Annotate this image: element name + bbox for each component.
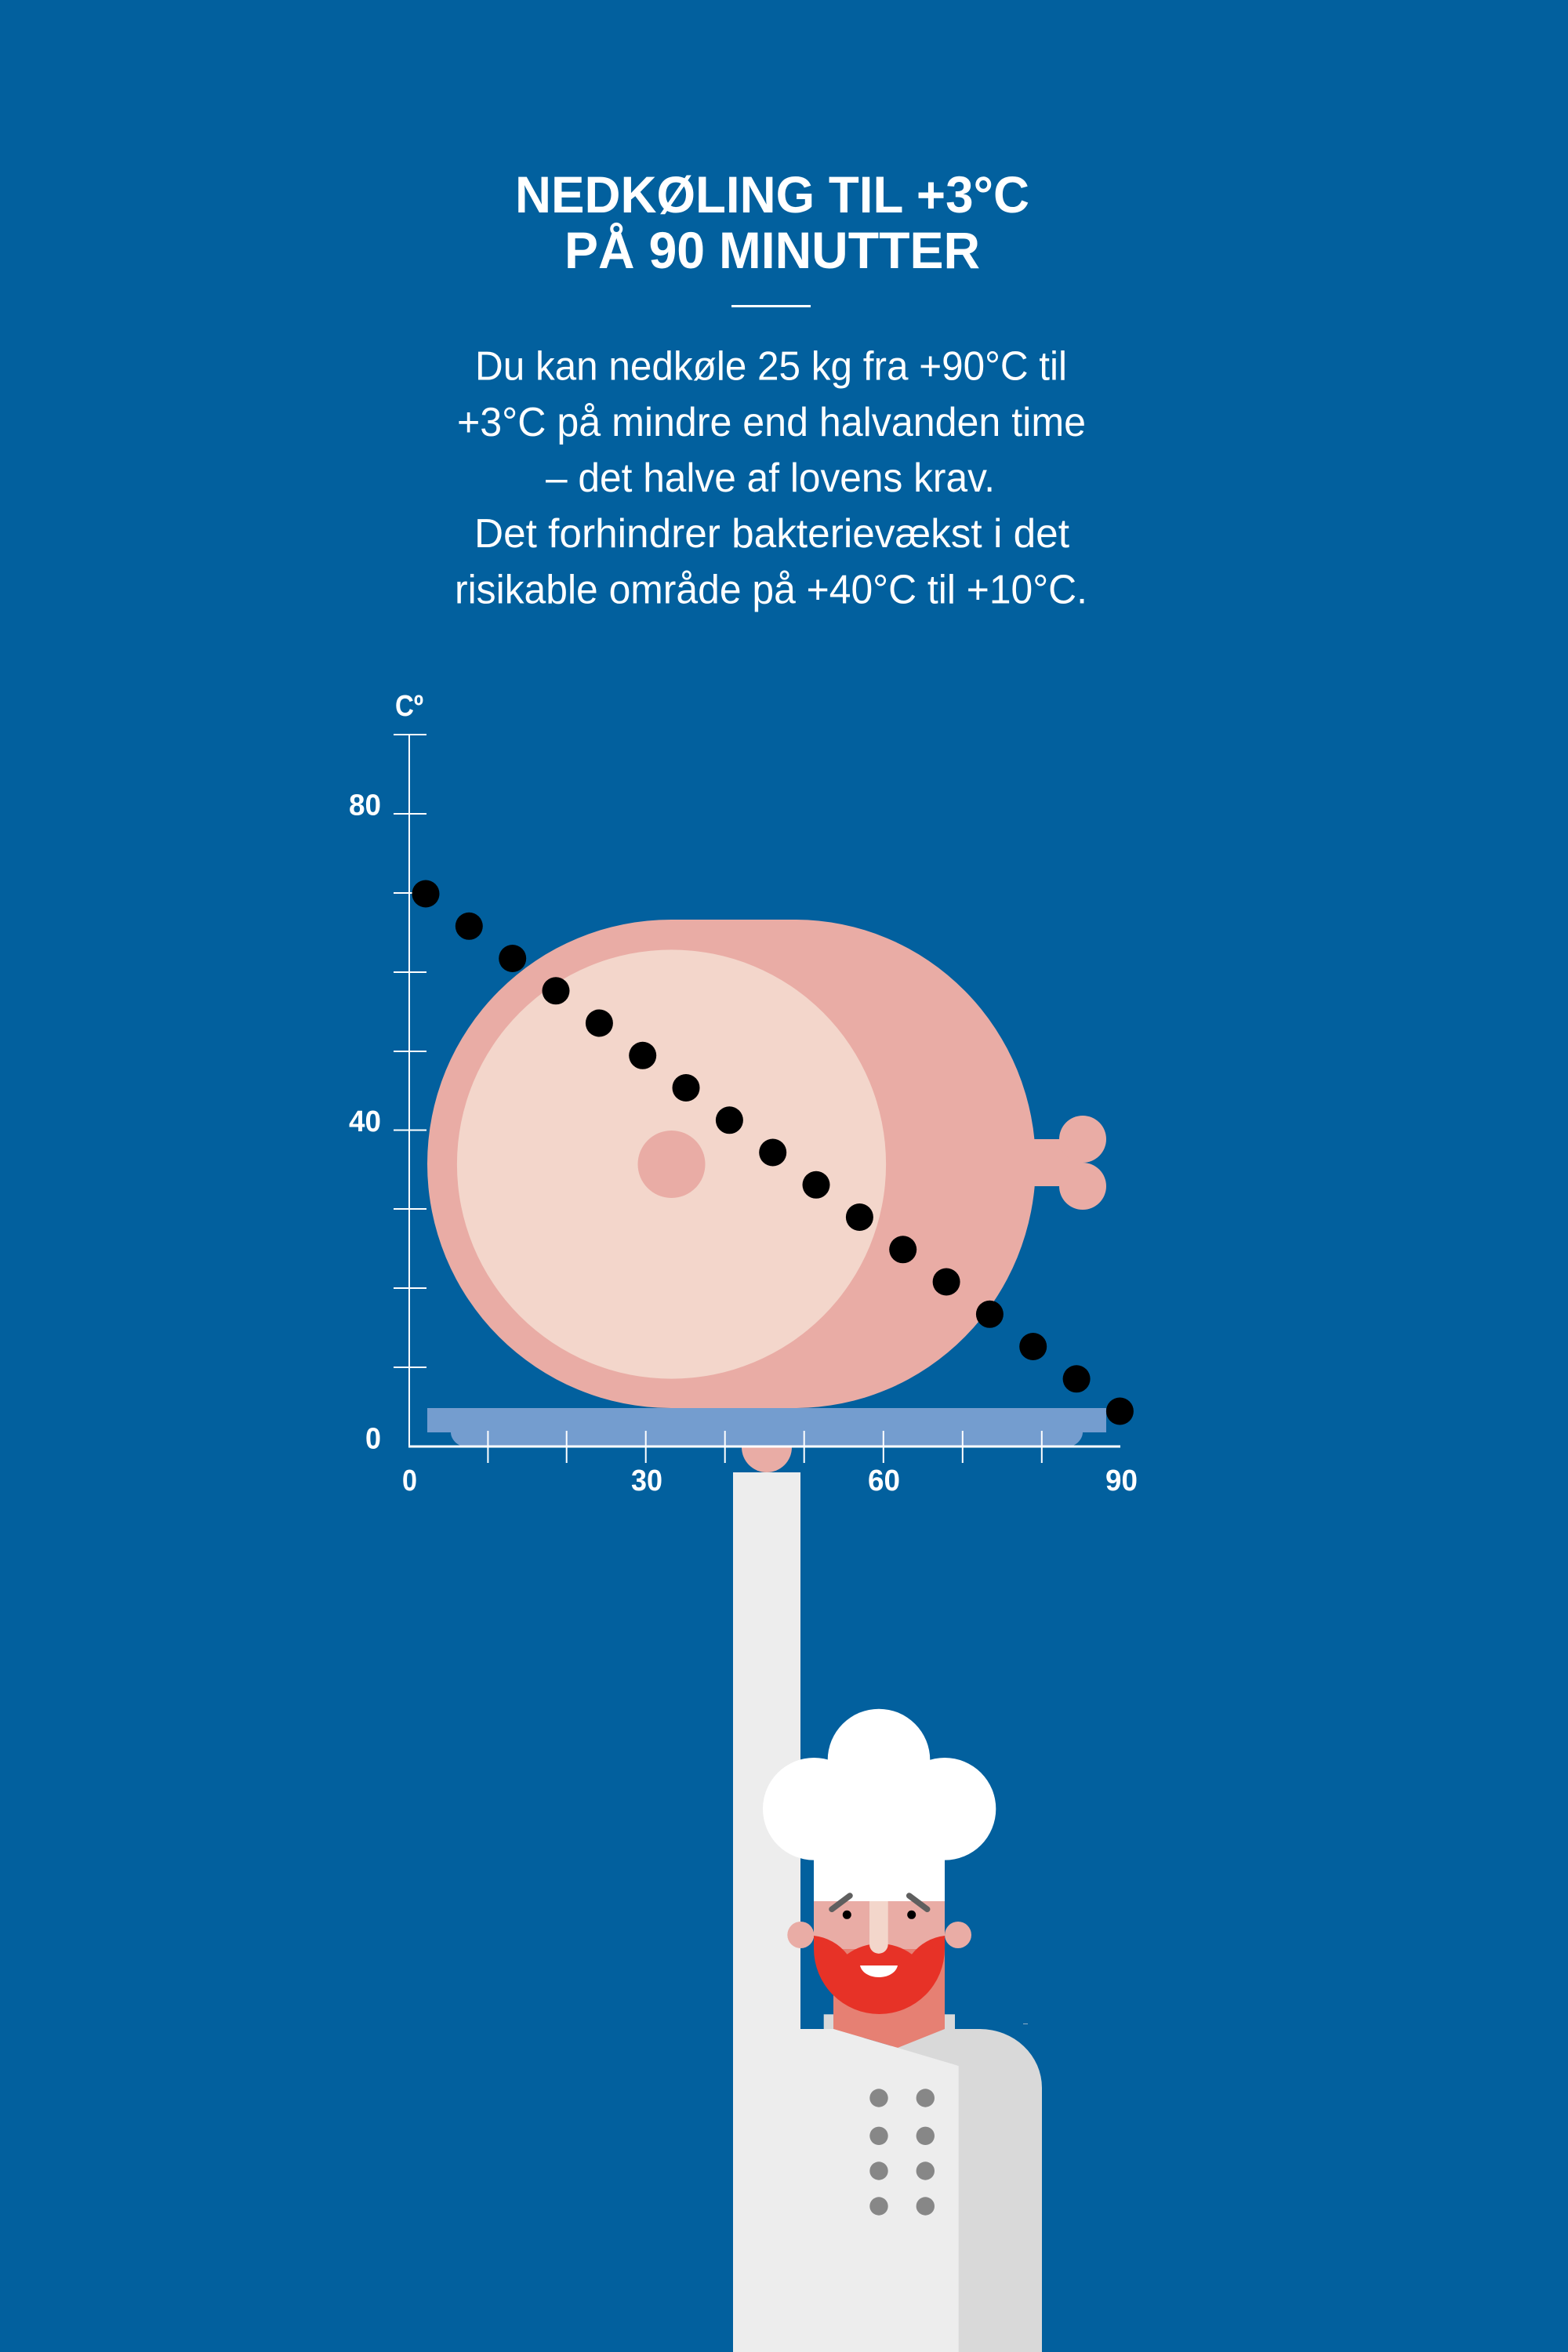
jacket front: [733, 2029, 959, 2352]
neck: [833, 1949, 945, 2048]
title: PÅ 90 MINUTTER: [564, 221, 980, 279]
intro text block: – det halve af lovens krav.: [546, 456, 995, 501]
icon: chef hand holding tray: [742, 1422, 792, 1472]
chart axes and ticks: [394, 735, 1120, 1463]
nose: [869, 1901, 888, 1954]
axis labels: 0: [402, 1465, 417, 1497]
jacket shaded side: [886, 2029, 1042, 2352]
intro text block: [455, 344, 1087, 612]
title: NEDKØLING TIL +3°C: [515, 165, 1029, 223]
axis labels: [349, 690, 1138, 1497]
chef illustration: [733, 1472, 1042, 2352]
intro text block: risikable område på +40°C til +10°C.: [455, 567, 1087, 612]
axis labels: 90: [1105, 1465, 1138, 1497]
intro text block: +3°C på mindre end halvanden time: [457, 400, 1086, 445]
axis labels: Cº: [395, 690, 423, 723]
beard: [814, 1936, 945, 2014]
eyes: [843, 1911, 916, 1919]
eyebrows: [832, 1896, 927, 1909]
axis labels: 60: [868, 1465, 900, 1497]
intro text block: Det forhindrer bakterievækst i det: [474, 511, 1070, 557]
axis labels: 30: [631, 1465, 662, 1497]
axis labels: 0: [365, 1422, 381, 1455]
axis labels: 80: [349, 789, 381, 822]
icon: ham: [427, 920, 1106, 1408]
mouth: [860, 1965, 898, 1977]
intro text block: Du kan nedkøle 25 kg fra +90°C til: [475, 344, 1067, 390]
cooling curve dots: [412, 880, 1134, 1425]
icon: serving tray: [427, 1408, 1106, 1446]
right ear: [945, 1922, 971, 1948]
chef hat: [763, 1709, 996, 1901]
left ear: [787, 1922, 814, 1948]
raised arm: [733, 1472, 800, 2352]
face: [814, 1897, 945, 1949]
jacket collar: [824, 2014, 955, 2038]
jacket buttons: [869, 2089, 935, 2216]
axis labels: 40: [349, 1105, 381, 1138]
title: [515, 165, 1029, 279]
